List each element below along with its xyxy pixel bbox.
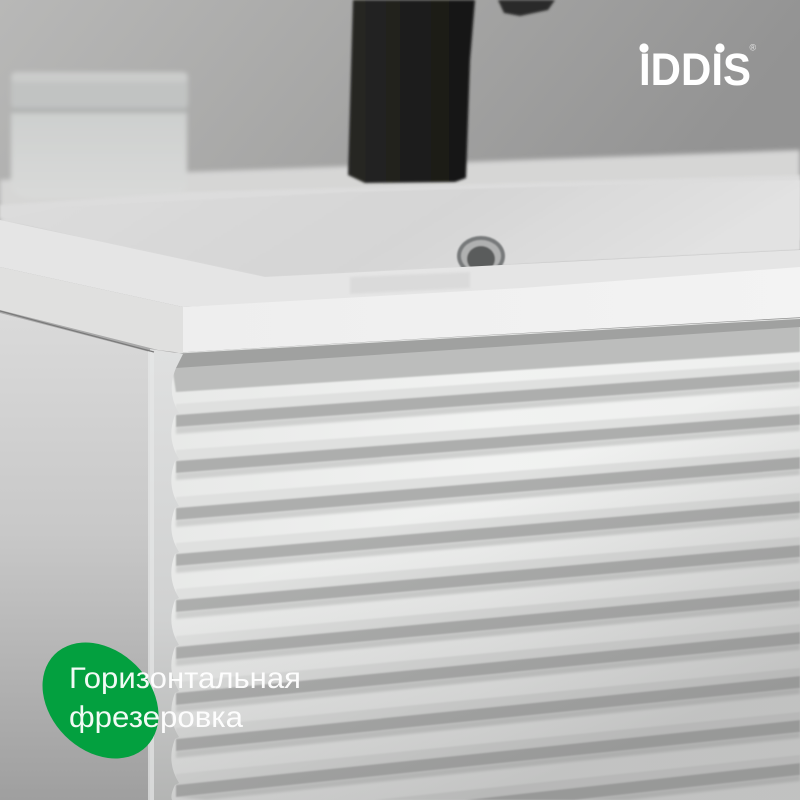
dark shadow gap: [0, 311, 154, 352]
logo: IDDIS: [639, 44, 751, 95]
panel gap highlight: [148, 351, 154, 800]
counter top surface: [0, 175, 800, 285]
caption: [69, 662, 301, 734]
fluted drawer front: [170, 318, 800, 800]
countertop front face: [183, 267, 800, 353]
basin: [0, 180, 800, 277]
rib lips: [176, 362, 800, 800]
caption: Горизонтальная: [69, 662, 301, 695]
recess under countertop: [170, 319, 800, 392]
background wall: [0, 0, 800, 200]
countertop left face: [0, 267, 183, 353]
sink rim: [0, 220, 800, 307]
scalloped side strip: [150, 349, 183, 800]
left cabinet side panel: [0, 313, 150, 800]
jar: [11, 72, 188, 198]
caption: фрезеровка: [69, 701, 243, 734]
groove soft lower edge: [176, 382, 800, 800]
overflow hole: [457, 236, 505, 276]
drawer shading: [170, 360, 800, 800]
green blob: [19, 619, 182, 782]
logo: ®: [750, 42, 756, 52]
backsplash ledge: [0, 150, 800, 225]
faucet: [348, 0, 555, 183]
rib grooves: [176, 370, 800, 800]
